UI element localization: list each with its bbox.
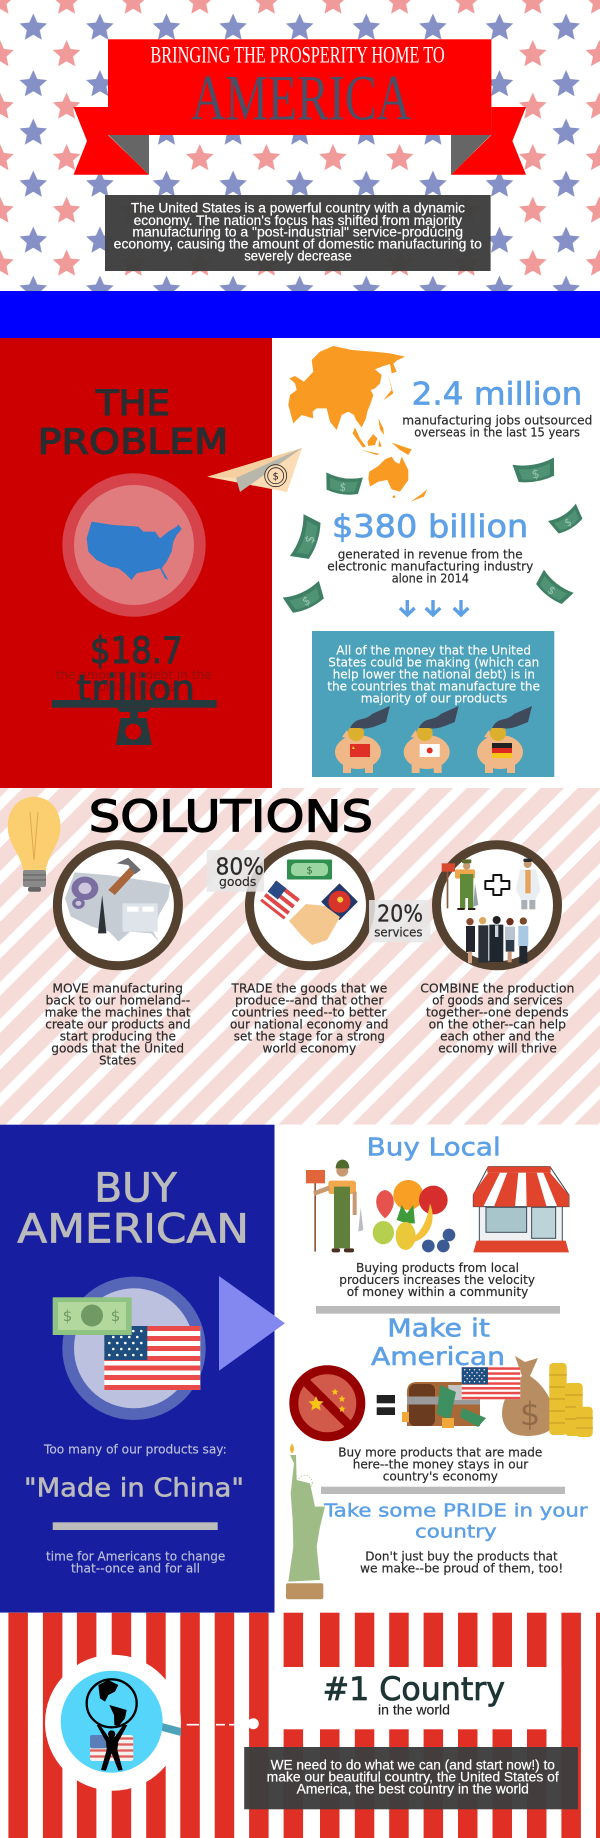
- intro text box: severely decrease: [244, 249, 352, 264]
- problem heading: THE: [95, 384, 170, 424]
- closing text box: [244, 1747, 578, 1809]
- debt caption: [56, 667, 212, 694]
- icons: flying money: $: [339, 480, 347, 494]
- title line 2: AMERICA: [191, 62, 411, 134]
- intro text box: The United States is a powerful country with a dynamic: [131, 201, 465, 216]
- text: combine production: economy will thrive: [438, 1040, 557, 1055]
- blue band: [0, 291, 600, 338]
- flag in badge: [90, 1735, 133, 1761]
- badge: 80% goods: 80%: [216, 854, 264, 880]
- intro text box: economy, causing the amount of domestic manufacturing to: [114, 237, 482, 252]
- panel: buy american right: [274, 1125, 600, 1613]
- text: too many products: Too many of our products say:: [43, 1441, 227, 1456]
- text: buy local: Buying products from local: [356, 1260, 519, 1275]
- text: combine production: [420, 980, 574, 1055]
- title line 1: BRINGING THE PROSPERITY HOME TO: [150, 43, 445, 68]
- text: trade goods: set the stage for a strong: [234, 1028, 385, 1043]
- text: time to change: [46, 1549, 226, 1576]
- map: asia and australia: [288, 346, 427, 502]
- buy american heading: BUY: [94, 1166, 177, 1212]
- callout: money abroad: States could be making (which can: [328, 654, 539, 669]
- stat: 2.4 million: overseas in the last 15 years: [414, 424, 580, 439]
- icon: light bulb: [8, 797, 60, 892]
- intro text box: economy. The nation's focus has shifted from majority: [134, 213, 462, 228]
- text: move manufacturing: States: [99, 1052, 136, 1067]
- text: move manufacturing: make the machines that: [45, 1004, 191, 1019]
- closing text box: WE need to do what we can (and start now!) to: [271, 1757, 555, 1772]
- text: move manufacturing: create our products and: [45, 1016, 191, 1031]
- icon: american flag small: [462, 1367, 520, 1399]
- icon: dollar bill: [53, 1297, 132, 1335]
- icon: paper plane: $: [273, 472, 279, 483]
- circle: trade goods: [250, 845, 370, 966]
- callout: money abroad: [312, 631, 554, 777]
- text: made here: country's economy: [383, 1469, 499, 1484]
- icon: farmer: [306, 1160, 363, 1252]
- problem heading: [38, 384, 228, 462]
- text: pride: Don't just buy the products that: [365, 1549, 558, 1564]
- text: trade goods: TRADE the goods that we: [231, 980, 388, 995]
- panel: solutions: [0, 788, 600, 1125]
- heading: pride: [323, 1501, 588, 1542]
- badge circle: [62, 1277, 206, 1420]
- circle: combine: [436, 845, 558, 966]
- icon: fruit: [373, 1180, 455, 1252]
- closing text box: America, the best country in the world: [297, 1781, 529, 1796]
- text: made here: [338, 1445, 543, 1484]
- subheading: in the world: in the world: [378, 1702, 450, 1717]
- debt caption: United States: [98, 679, 175, 694]
- usa map badge: [62, 473, 206, 617]
- icon: paper plane: [207, 448, 302, 492]
- text: move manufacturing: goods that the United: [51, 1040, 184, 1055]
- text: trade goods: world economy: [262, 1040, 357, 1055]
- text: pride: [360, 1549, 563, 1576]
- stat: 380 billion: generated in revenue from the: [338, 546, 523, 561]
- circle: move manufacturing: [57, 845, 178, 966]
- text: combine production: on the other--can help: [429, 1016, 566, 1031]
- atlas figure: [97, 1725, 127, 1771]
- problem heading: PROBLEM: [38, 422, 228, 462]
- stat: 2.4 million: [402, 376, 592, 439]
- intro text box: manufacturing to a "post-industrial" service-producing: [132, 225, 463, 240]
- text: move manufacturing: back to our homeland--: [46, 992, 190, 1007]
- handshake: [289, 904, 340, 945]
- debt figure: trillion: [77, 667, 195, 710]
- icon: money bag: $: [520, 1395, 540, 1433]
- heading: number one country: #1 Country: [323, 1670, 505, 1708]
- icons: flying money: [283, 458, 586, 616]
- text: made here: here--the money stays in our: [353, 1457, 529, 1472]
- bill icon: $: [306, 866, 313, 876]
- text: move manufacturing: start producing the: [60, 1028, 176, 1043]
- text: time to change: time for Americans to change: [46, 1549, 226, 1564]
- flag diamond china: [321, 883, 358, 920]
- stat: 2.4 million: 2.4 million: [412, 376, 582, 412]
- icon: scale: [52, 700, 217, 745]
- icon: piggy bank japan: [404, 706, 459, 773]
- text: move manufacturing: [45, 980, 191, 1067]
- heading: make it american: [371, 1314, 505, 1371]
- icon: dollar bill: $: [63, 1307, 72, 1325]
- badge: 20% services: services: [374, 925, 422, 940]
- text: combine production: each other and the: [440, 1028, 555, 1043]
- buy american heading: [17, 1166, 249, 1253]
- text: made here: Buy more products that are made: [338, 1445, 543, 1460]
- intro text box: [105, 195, 491, 271]
- farmer figure: [442, 859, 478, 910]
- debt figure: $18.7: [90, 629, 183, 672]
- callout: money abroad: majority of our products: [361, 690, 507, 705]
- icon: atlas holding the globe: [61, 1671, 163, 1773]
- text: buy local: of money within a community: [347, 1284, 529, 1299]
- icon: equals sign: [377, 1395, 395, 1415]
- divider bar: [316, 1306, 560, 1314]
- debt figure: [77, 629, 195, 710]
- heading: buy local: Buy Local: [367, 1133, 501, 1162]
- badge: 80% goods: [207, 850, 264, 892]
- icon: no china sign: [294, 1370, 361, 1437]
- connector: dashed line: [45, 1655, 259, 1791]
- stat: 380 billion: [327, 509, 534, 585]
- badge: 20% services: [369, 900, 430, 942]
- header background: star pattern: [0, 0, 600, 291]
- panel: the problem: [0, 338, 272, 788]
- solutions heading: SOLUTIONS: [89, 792, 373, 843]
- debt caption: the amount of debt in the: [56, 667, 212, 682]
- text: buy local: producers increases the velocity: [339, 1272, 536, 1287]
- heading: make it american: American: [371, 1342, 505, 1371]
- icon: dollar bill: $: [111, 1307, 120, 1325]
- icon: money bag: [502, 1356, 554, 1436]
- text: pride: we make--be proud of them, too!: [360, 1561, 563, 1576]
- stat: 380 billion: alone in 2014: [392, 570, 469, 585]
- callout: money abroad: All of the money that the United: [336, 642, 531, 657]
- doctor figure: [516, 859, 541, 909]
- divider bar: [53, 1522, 218, 1530]
- icon: piggy bank china: [335, 706, 390, 773]
- icon: flag: [104, 1326, 200, 1390]
- icons: flying money: $: [545, 583, 558, 598]
- flag diamond usa: [260, 881, 300, 919]
- quote: made in china: "Made in China": [24, 1474, 244, 1504]
- icons: flying money: $: [531, 466, 540, 482]
- icons: flying money: $: [300, 593, 313, 609]
- text: trade goods: [230, 980, 388, 1055]
- text: combine production: of goods and services: [432, 992, 563, 1007]
- icon: treasure chest: [402, 1382, 486, 1428]
- text: trade goods: our national economy and: [230, 1016, 388, 1031]
- stat: 380 billion: $380 billion: [332, 509, 528, 545]
- stat: 380 billion: electronic manufacturing industry: [327, 558, 534, 573]
- business people: [466, 916, 528, 963]
- text: time to change: that--once and for all: [71, 1561, 200, 1576]
- icon: piggy bank germany: [477, 706, 532, 773]
- panel: buy american left: [0, 1125, 285, 1613]
- plus sign: [485, 875, 509, 895]
- icon: shop: [473, 1167, 569, 1252]
- icons: flying money: $: [301, 533, 318, 545]
- panel: number one country: [0, 1613, 600, 1838]
- badge: 80% goods: goods: [219, 874, 256, 889]
- globe: [87, 1679, 137, 1727]
- buy american heading: AMERICAN: [17, 1207, 249, 1253]
- panel: outsourcing facts: [207, 338, 600, 788]
- icon: coin stacks: [549, 1363, 593, 1437]
- heading: pride: country: [415, 1521, 497, 1542]
- text: combine production: COMBINE the production: [420, 980, 574, 995]
- callout: money abroad: the countries that manufacture the: [327, 678, 540, 693]
- callout: money abroad: help lower the national debt) is in: [333, 666, 535, 681]
- icons: flying money: $: [563, 517, 574, 530]
- divider bar: [321, 1487, 565, 1494]
- badge: 20% services: 20%: [377, 902, 423, 928]
- arrows: down: [400, 600, 468, 615]
- title ribbon: [74, 39, 526, 175]
- text: trade goods: countries need--to better: [232, 1004, 387, 1019]
- stat: 2.4 million: manufacturing jobs outsourced: [402, 412, 592, 427]
- text: trade goods: produce--and that other: [235, 992, 384, 1007]
- icon: statue of liberty: [286, 1443, 325, 1599]
- text: buy local: [339, 1260, 536, 1299]
- text: combine production: together--one depends: [426, 1004, 569, 1019]
- text: move manufacturing: MOVE manufacturing: [52, 980, 183, 995]
- heading: pride: Take some PRIDE in your: [323, 1501, 588, 1522]
- arrow: triangle: [219, 1276, 285, 1371]
- heading: make it american: Make it: [387, 1314, 490, 1343]
- closing text box: make our beautiful country, the United States of: [267, 1770, 559, 1785]
